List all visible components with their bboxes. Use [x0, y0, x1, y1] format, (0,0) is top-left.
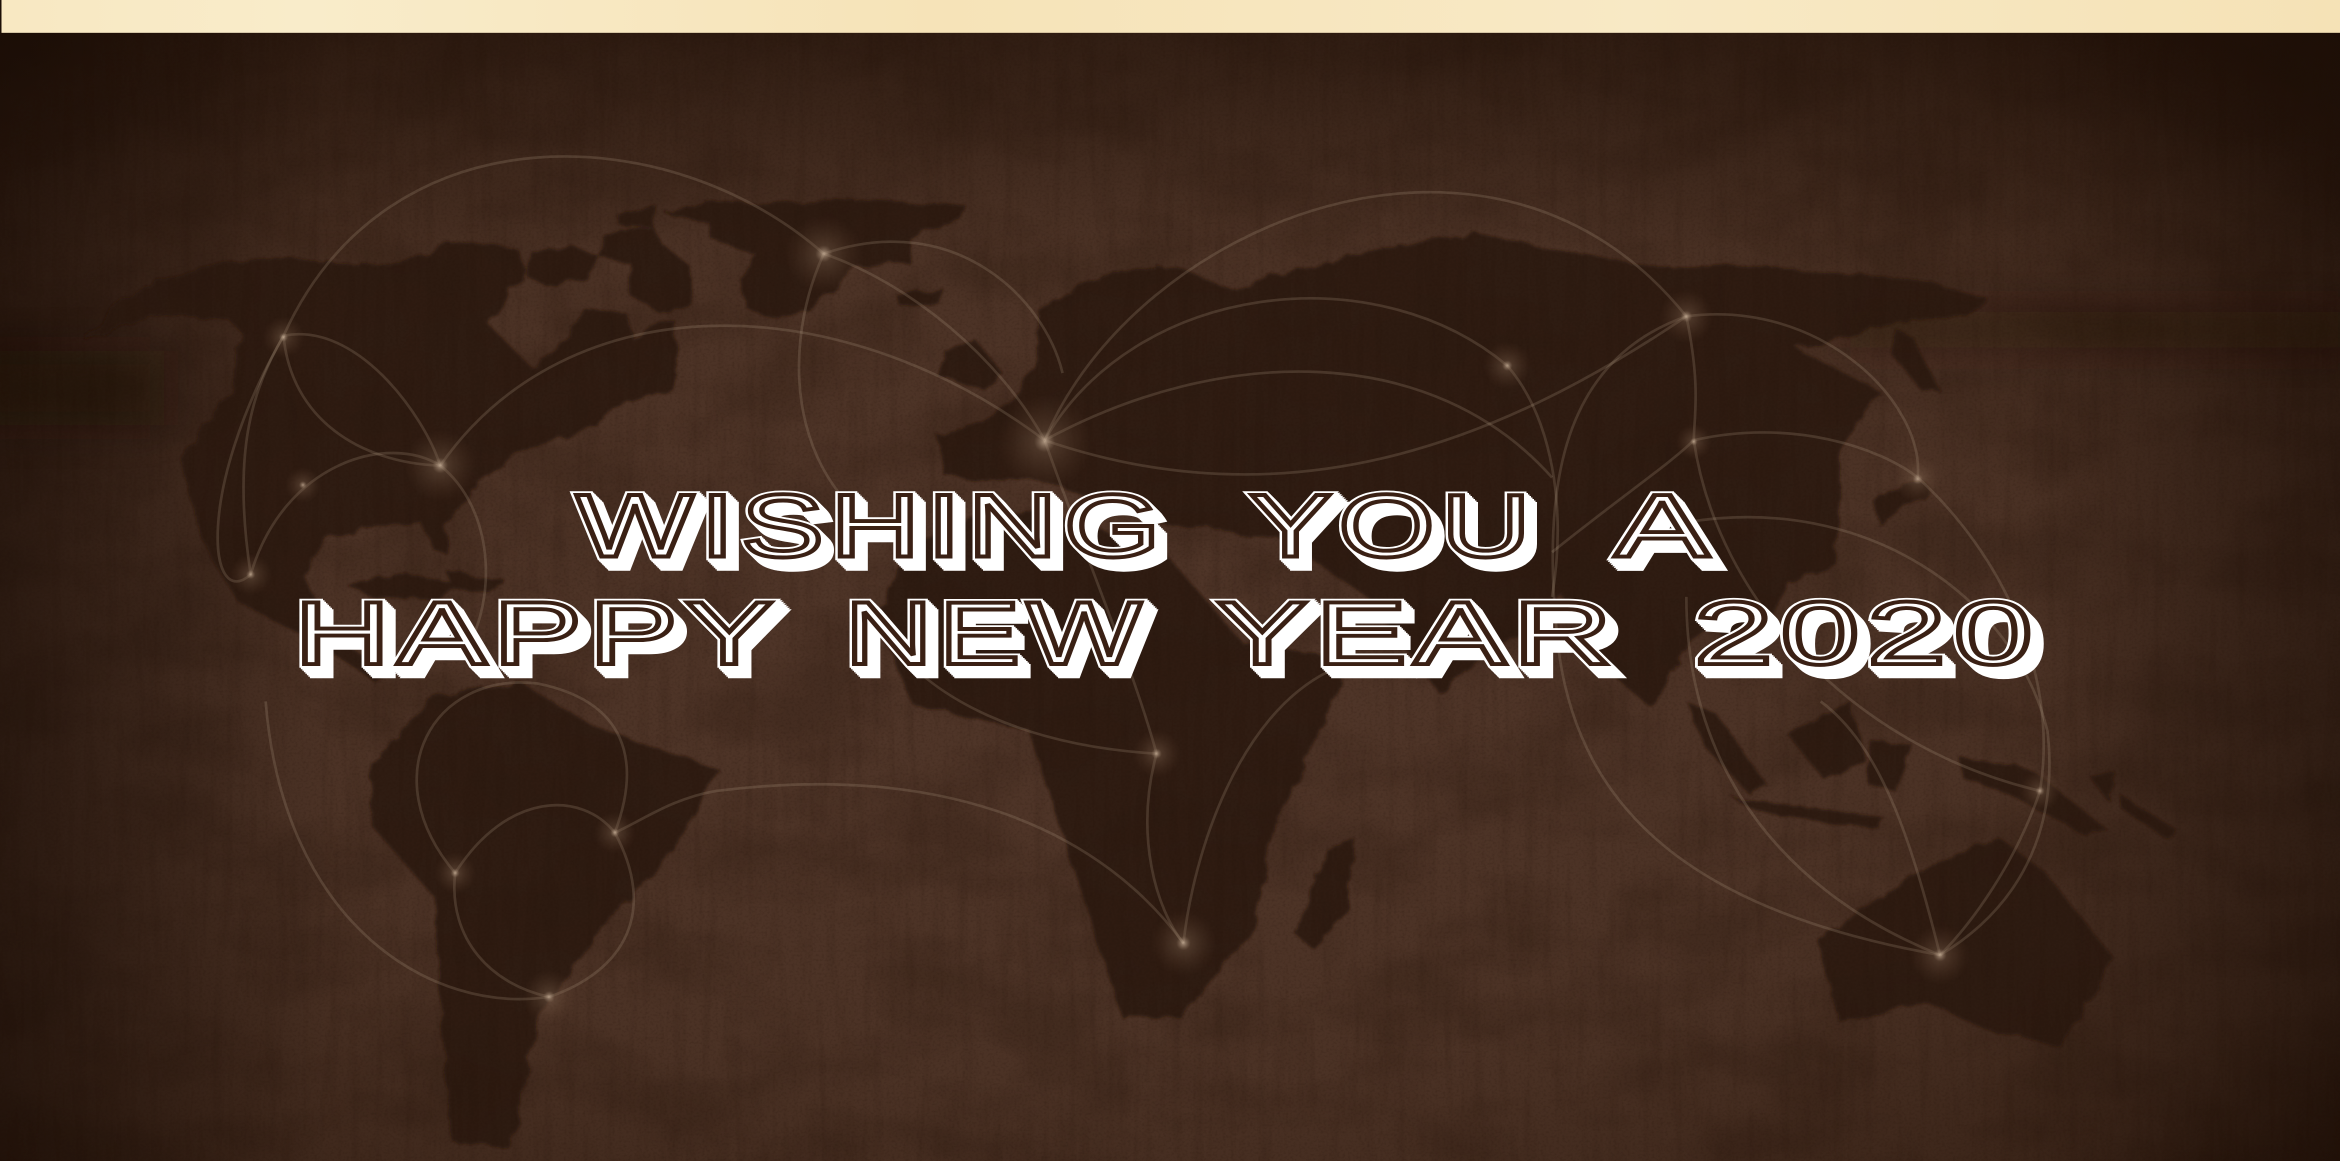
- Iceland and UK: [895, 288, 1003, 391]
- Greenland: [663, 200, 967, 319]
- white extruded base of the letters: WISHING: [576, 476, 1167, 576]
- network arcs: [218, 156, 2049, 999]
- white extruded base of the letters: HAPPY: [294, 583, 780, 683]
- inline face of the letters: A: [1615, 476, 1716, 576]
- headline: wishing you a happy new year 2020: [294, 476, 2040, 683]
- Eurasia: [937, 233, 1988, 707]
- Australia: [1818, 839, 2113, 1048]
- North America: [85, 240, 678, 680]
- white extruded base of the letters: NEW: [845, 583, 1148, 683]
- Madagascar: [1295, 839, 1355, 949]
- top wood strip: [1, 0, 2340, 33]
- inline face of the letters: WISHING: [576, 476, 1167, 576]
- white extruded base of the letters: [294, 476, 2040, 683]
- white extruded base of the letters: YOU: [1249, 476, 1537, 576]
- white extruded base of the letters: YEAR: [1216, 583, 1619, 683]
- inline face of the letters: HAPPY: [294, 583, 780, 683]
- Caribbean islands: [346, 570, 507, 600]
- inline face of the letters: YEAR: [1216, 583, 1619, 683]
- Africa: [875, 510, 1352, 1018]
- white extruded base of the letters: A: [1615, 476, 1716, 576]
- network glow points: [230, 215, 2061, 1024]
- inline face of the letters: NEW: [845, 583, 1148, 683]
- Southeast Asia islands: [1686, 701, 2176, 839]
- Arctic islands: [525, 206, 692, 310]
- South America: [370, 683, 719, 1149]
- white extruded base of the letters: 2020: [1694, 583, 2040, 683]
- world map silhouette: [85, 200, 2176, 1149]
- Kamchatka and Japan: [1873, 328, 1940, 522]
- inline face of the letters: 2020: [1694, 583, 2040, 683]
- inline face of the letters: YOU: [1249, 476, 1537, 576]
- inline face of the letters: [294, 476, 2040, 683]
